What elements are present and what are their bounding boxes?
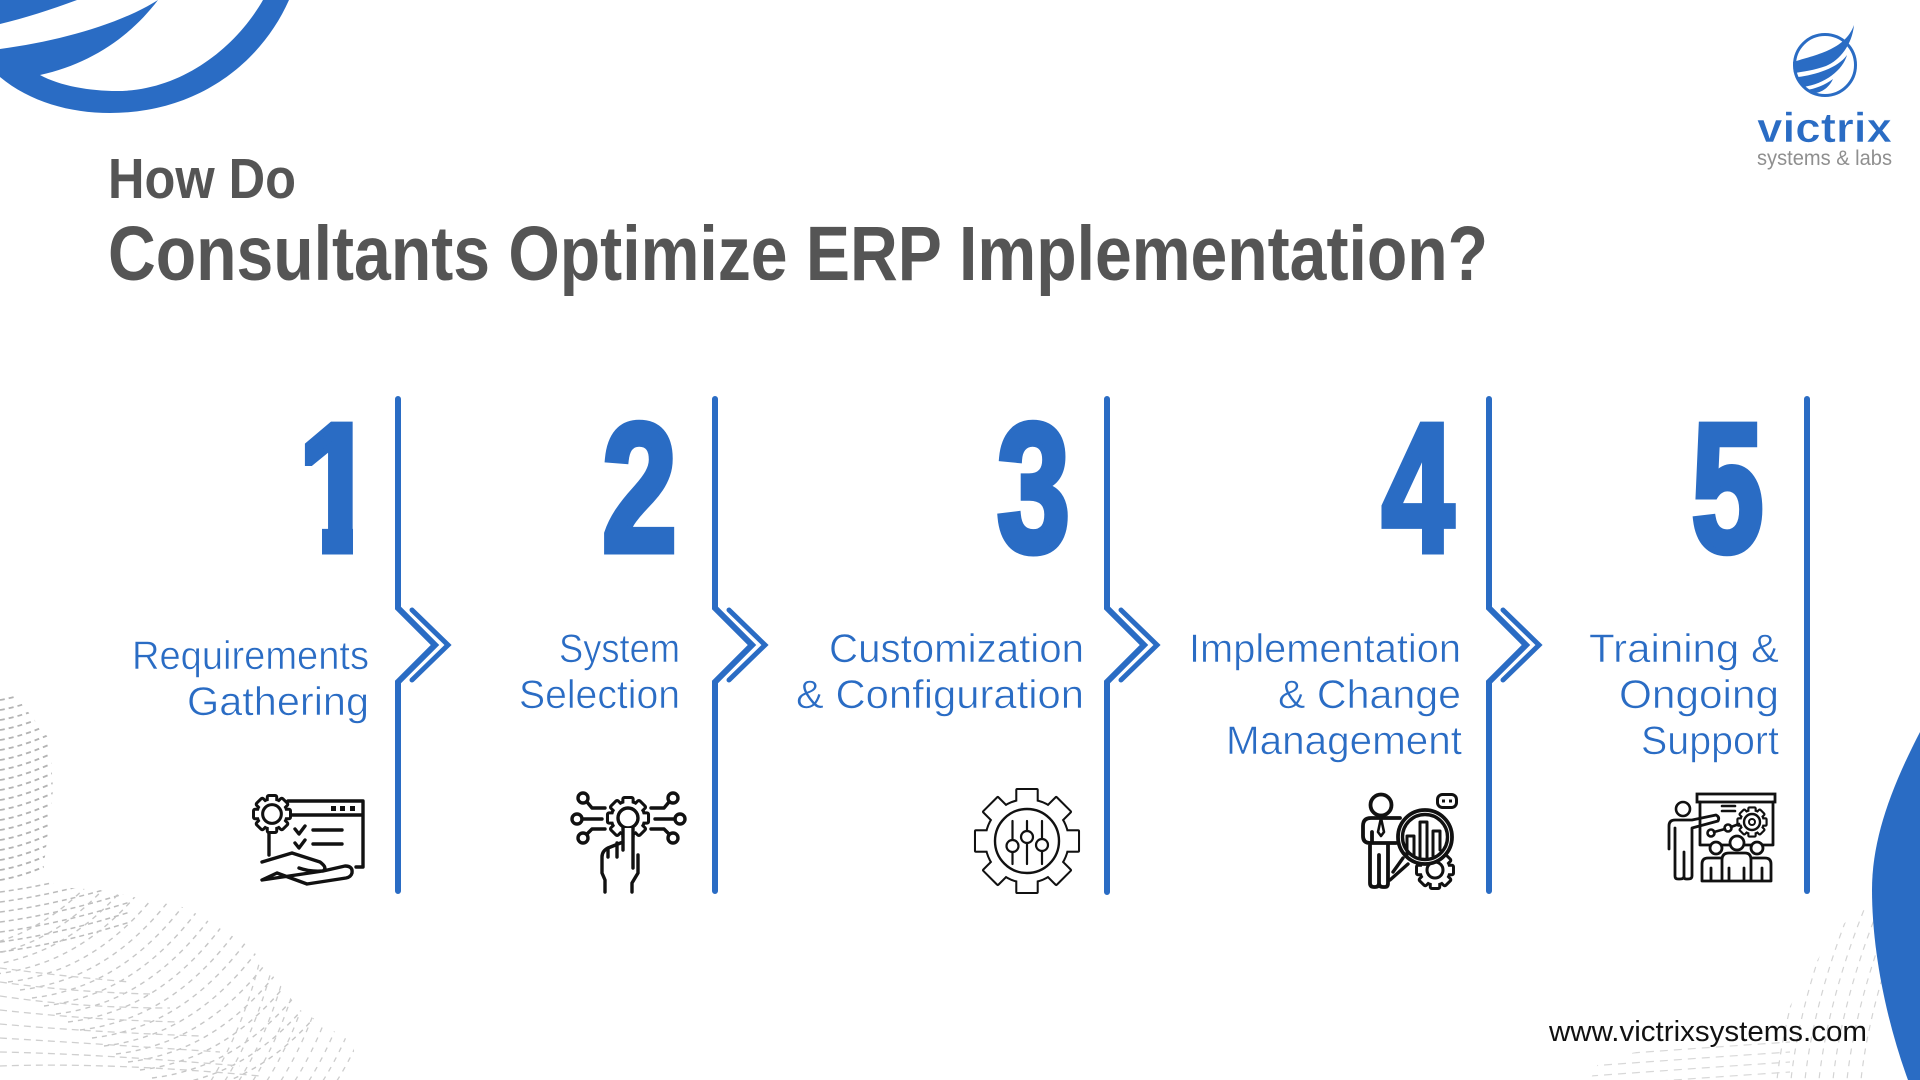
title line 1: How Do bbox=[108, 147, 296, 211]
divider arrow 2 bbox=[715, 399, 765, 891]
label 5: Support bbox=[1641, 719, 1779, 763]
label 3 bbox=[796, 627, 1084, 717]
label 4: Management bbox=[1226, 719, 1462, 763]
step 5: Training & Ongoing Support bbox=[1589, 385, 1807, 891]
label 4: & Change bbox=[1278, 673, 1461, 717]
title line 2: Consultants Optimize ERP Implementation? bbox=[108, 211, 1488, 297]
label 4: Implementation bbox=[1189, 627, 1461, 671]
step 3: Customization & Configuration bbox=[796, 385, 1157, 892]
label 1: Gathering bbox=[187, 680, 369, 724]
icon: consultant with magnifier chart and gear bbox=[1363, 794, 1456, 887]
logo tagline: systems & labs bbox=[1757, 147, 1892, 170]
label 5: Training & bbox=[1589, 627, 1779, 671]
divider arrow 1 bbox=[398, 399, 448, 891]
logo wordmark: victrix bbox=[1757, 104, 1893, 151]
label 3: Customization bbox=[829, 627, 1084, 671]
decorative swoosh top left bbox=[0, 0, 289, 113]
number 1: 1 bbox=[298, 385, 376, 590]
label 5: Ongoing bbox=[1619, 673, 1779, 717]
logo globe bbox=[1793, 25, 1856, 96]
step 1: Requirements Gathering bbox=[132, 385, 448, 891]
label 2: System bbox=[559, 627, 680, 671]
background: dotted wave bottom right bbox=[1592, 910, 1882, 1080]
background: dotted wave bottom left bbox=[0, 696, 354, 1080]
website url: www.victrixsystems.com bbox=[1548, 1016, 1867, 1048]
label 2: Selection bbox=[519, 673, 680, 717]
label 2 bbox=[519, 627, 680, 717]
number 3: 3 bbox=[997, 385, 1070, 590]
icon: gear with sliders bbox=[976, 790, 1078, 892]
step 4: Implementation & Change Management bbox=[1189, 385, 1539, 891]
label 1 bbox=[132, 634, 369, 724]
step 2: System Selection bbox=[519, 385, 765, 894]
number 4: 4 bbox=[1382, 385, 1454, 590]
divider line 5 bbox=[1804, 399, 1810, 891]
decorative blue circle right edge bbox=[1872, 732, 1920, 1080]
number 2: 2 bbox=[602, 385, 677, 590]
title bbox=[108, 147, 1488, 297]
icon: trainer presenting to audience bbox=[1669, 794, 1775, 881]
divider arrow 4 bbox=[1489, 399, 1539, 891]
label 4 bbox=[1189, 627, 1462, 763]
icon: checklist on a hand with gear bbox=[255, 797, 363, 884]
number 5: 5 bbox=[1692, 385, 1764, 590]
divider arrow 3 bbox=[1107, 399, 1157, 892]
label 5 bbox=[1589, 627, 1779, 763]
label 1: Requirements bbox=[132, 634, 369, 678]
icon: finger touching gear with circuits bbox=[572, 793, 685, 894]
label 3: & Configuration bbox=[796, 673, 1084, 717]
logo: victrix systems & labs bbox=[1757, 25, 1893, 170]
